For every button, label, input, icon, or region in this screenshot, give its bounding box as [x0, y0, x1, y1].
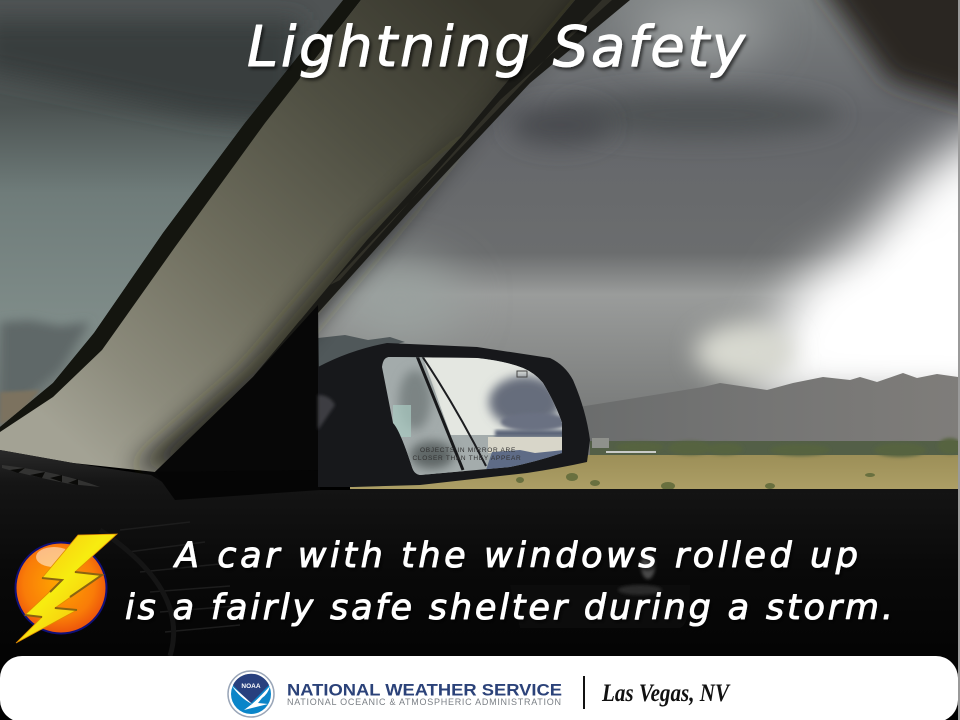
A-pillar	[0, 0, 575, 472]
location: Las Vegas, NV	[601, 680, 731, 707]
console shapes	[510, 585, 690, 628]
caption: is a fairly safe shelter during a storm.	[125, 588, 893, 628]
dash vent slits	[2, 465, 100, 487]
field and treeline	[350, 438, 960, 491]
organization name: NATIONAL OCEANIC & ATMOSPHERIC ADMINISTRATION	[287, 697, 561, 707]
air vent	[100, 522, 240, 656]
mountains	[560, 373, 958, 442]
dashboard	[0, 450, 958, 720]
dark window trim	[155, 0, 630, 472]
mirror sail	[150, 305, 320, 490]
side mirror	[318, 343, 590, 487]
organization name	[287, 682, 562, 707]
side mirror: CLOSER THAN THEY APPEAR	[413, 455, 521, 462]
icon: NOAA logo: NOAA	[241, 683, 261, 690]
icon: NOAA logo	[228, 671, 274, 717]
windshield glass left	[0, 0, 360, 430]
divider	[583, 676, 585, 709]
organization name: NATIONAL WEATHER SERVICE	[287, 682, 562, 700]
pillar side shading	[130, 0, 605, 470]
footer band	[0, 656, 958, 720]
right image edge	[958, 0, 960, 720]
sky and storm clouds	[300, 0, 960, 460]
dark window seal	[0, 0, 361, 433]
title: Lightning Safety	[247, 15, 746, 80]
icon: lightning ball	[16, 534, 117, 643]
caption: A car with the windows rolled up	[173, 536, 858, 576]
lower dash dark shadow	[155, 470, 320, 500]
mirror warning text: OBJECTS IN MIRROR ARE	[420, 447, 516, 454]
caption	[125, 536, 893, 628]
